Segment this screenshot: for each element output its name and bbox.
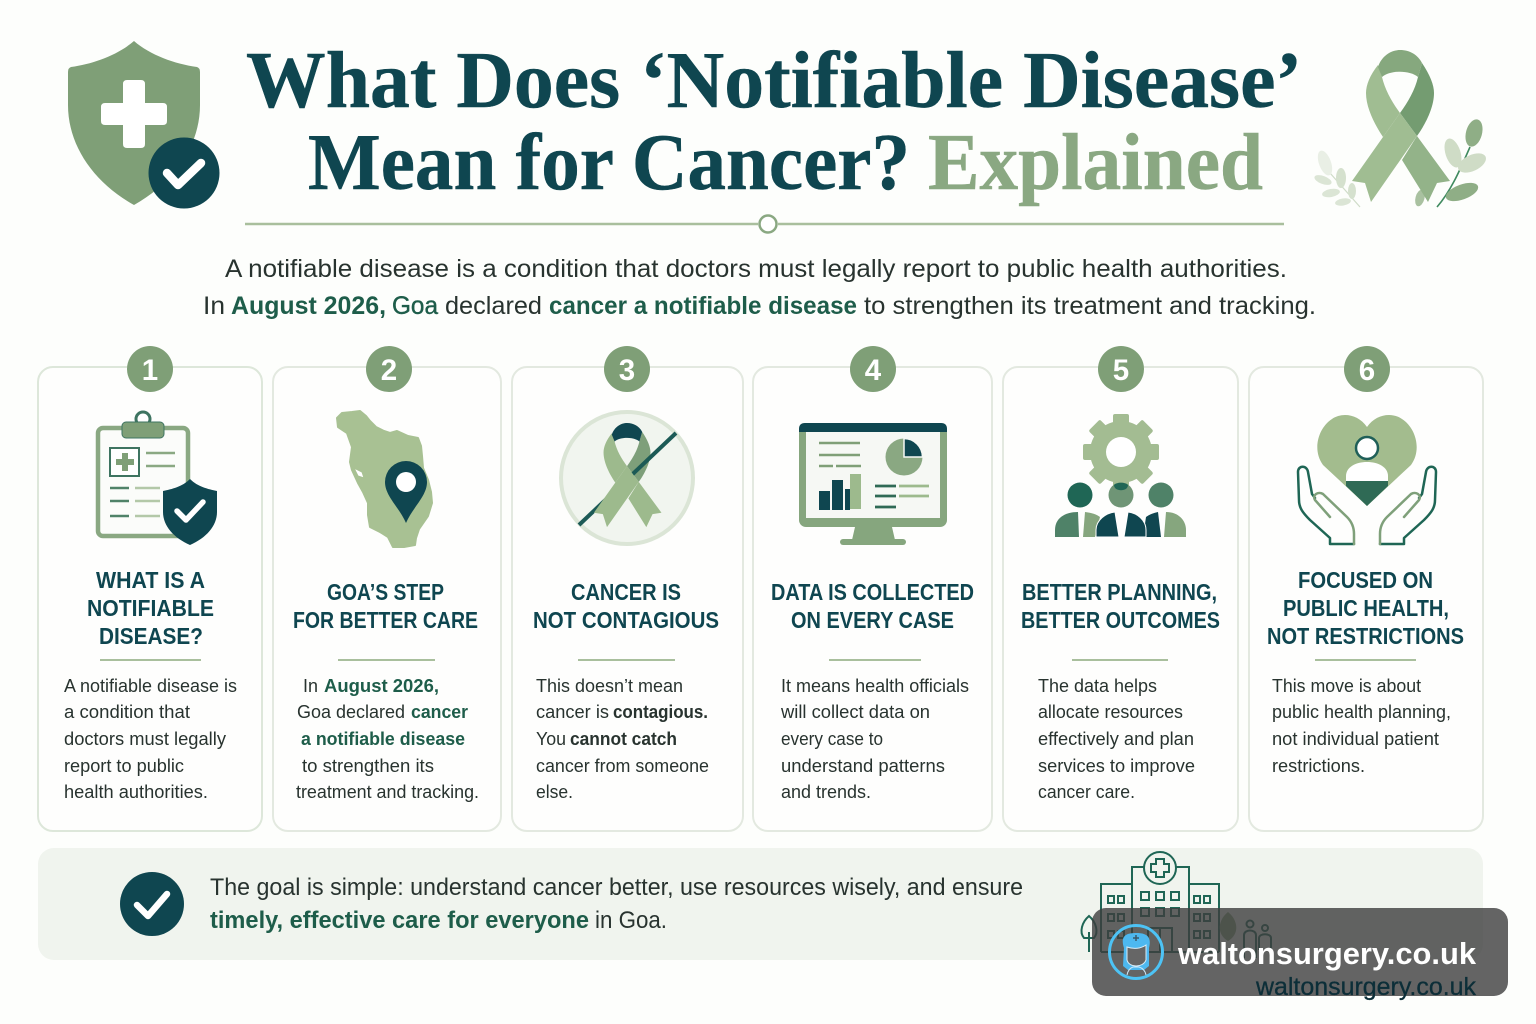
body text: else.: [536, 781, 573, 802]
body text: treatment and tracking.: [296, 781, 479, 802]
body text: [64, 675, 237, 802]
number badge 1: 1: [142, 354, 158, 387]
body text: allocate resources: [1038, 701, 1183, 722]
panel: goal banner: [38, 848, 1483, 960]
goal text: timely, effective care for everyone: [210, 907, 589, 934]
heading: [533, 579, 719, 633]
panel: card 6 focused on public health: [1249, 346, 1483, 831]
watermark logo: nurse: [1110, 926, 1162, 978]
panel: card 4 data is collected: [753, 346, 992, 831]
body text: This move is about: [1272, 675, 1421, 696]
heading: BETTER OUTCOMES: [1021, 607, 1220, 633]
icon: hospital with trees and family: [1082, 852, 1271, 958]
number badge 1: [127, 346, 173, 392]
body text: health authorities.: [64, 781, 208, 802]
body text: and trends.: [781, 781, 871, 802]
heading: FOCUSED ON: [1298, 567, 1433, 593]
heading: BETTER PLANNING,: [1022, 579, 1217, 605]
intro text: declared: [445, 292, 542, 320]
body text: a condition that: [64, 701, 190, 722]
heading: PUBLIC HEALTH,: [1283, 595, 1449, 621]
panel: card 2 goa's step: [273, 346, 501, 831]
goal text: The goal is simple: understand cancer better, use resources wisely, and ensure: [210, 874, 1023, 901]
intro text: [203, 255, 1316, 320]
number badge 6: 6: [1359, 354, 1375, 387]
body text: effectively and plan: [1038, 728, 1194, 749]
body text: The data helps: [1038, 675, 1157, 696]
body text: contagious.: [613, 701, 708, 722]
body text: a notifiable disease: [301, 728, 465, 749]
body text: will collect data on: [780, 701, 930, 722]
heading: FOR BETTER CARE: [293, 607, 478, 633]
source url text: waltonsurgery.co.uk: [1255, 973, 1476, 1001]
title: What Does ‘Notifiable Disease’: [246, 35, 1302, 125]
number badge 3: 3: [619, 354, 635, 387]
title: Explained: [928, 117, 1263, 207]
number badge 6: [1344, 346, 1390, 392]
body text: A notifiable disease is: [64, 675, 237, 696]
watermark badge: [1092, 908, 1508, 1001]
title divider: [245, 216, 1284, 232]
intro text: August 2026,: [231, 292, 386, 320]
icon: shield with medical cross and check: [68, 41, 220, 208]
title: Mean for Cancer?: [308, 117, 910, 207]
heading: NOTIFIABLE: [87, 595, 214, 621]
body text: [780, 675, 969, 802]
body text: August 2026,: [324, 675, 439, 696]
number badge 5: [1098, 346, 1144, 392]
heading: DISEASE?: [99, 623, 203, 649]
icon: clipboard with shield: [98, 412, 217, 545]
body text: to strengthen its: [302, 755, 434, 776]
heading: GOA’S STEP: [327, 579, 444, 605]
heading: NOT CONTAGIOUS: [533, 607, 719, 633]
icon: gear above team: [1055, 414, 1186, 537]
body text: [1272, 675, 1451, 776]
body text: report to public: [64, 755, 184, 776]
icon: hands holding heart with person: [1298, 415, 1436, 544]
heading: WHAT IS A: [96, 567, 205, 593]
body text: services to improve: [1038, 755, 1195, 776]
number badge 4: [850, 346, 896, 392]
panel: card 1 what is a notifiable disease: [38, 346, 262, 831]
body text: You: [536, 728, 566, 749]
number badge 4: 4: [865, 354, 882, 387]
body text: [1038, 675, 1195, 802]
intro text: Goa: [392, 292, 438, 320]
heading: [87, 567, 214, 649]
title: [246, 35, 1302, 207]
body text: cancer from someone: [536, 755, 709, 776]
intro text: In: [203, 292, 225, 320]
body text: [536, 675, 709, 802]
heading: [293, 579, 478, 633]
body text: restrictions.: [1272, 755, 1365, 776]
body text: cancer is: [536, 701, 609, 722]
heading: [771, 579, 974, 633]
icon: crossed out ribbon: [561, 412, 693, 544]
body text: cancer care.: [1038, 781, 1135, 802]
intro text: A notifiable disease is a condition that doctors must legally report to public health authorities.: [225, 255, 1287, 283]
heading: NOT RESTRICTIONS: [1267, 623, 1464, 649]
number badge 2: 2: [381, 354, 397, 387]
goal text: in Goa.: [595, 907, 667, 934]
body text: not individual patient: [1272, 728, 1439, 749]
body text: understand patterns: [781, 755, 945, 776]
body text: cannot catch: [570, 728, 677, 749]
body text: [296, 675, 479, 802]
body text: cancer: [411, 701, 468, 722]
body text: It means health officials: [781, 675, 969, 696]
number badge 2: [366, 346, 412, 392]
icon: monitor with charts: [799, 423, 947, 545]
body text: In: [303, 675, 318, 696]
body text: public health planning,: [1272, 701, 1451, 722]
icon: goa map with location pin: [337, 411, 432, 547]
body text: This doesn’t mean: [536, 675, 683, 696]
heading: [1267, 567, 1464, 649]
number badge 3: [604, 346, 650, 392]
body text: doctors must legally: [64, 728, 227, 749]
body text: Goa declared: [297, 701, 405, 722]
intro text: to strengthen its treatment and tracking.: [864, 292, 1316, 320]
watermark text: waltonsurgery.co.uk: [1177, 936, 1477, 971]
heading: ON EVERY CASE: [791, 607, 954, 633]
intro text: cancer a notifiable disease: [549, 292, 857, 320]
heading: CANCER IS: [571, 579, 681, 605]
panel: card 5 better planning: [1003, 346, 1238, 831]
panel: card 3 cancer is not contagious: [512, 346, 743, 831]
icon: awareness ribbon with leaves: [1313, 50, 1489, 207]
heading: [1021, 579, 1220, 633]
number badge 5: 5: [1113, 354, 1129, 387]
icon: check circle: [120, 872, 184, 936]
goal text: [210, 874, 1023, 934]
body text: every case to: [781, 728, 883, 749]
heading: DATA IS COLLECTED: [771, 579, 974, 605]
